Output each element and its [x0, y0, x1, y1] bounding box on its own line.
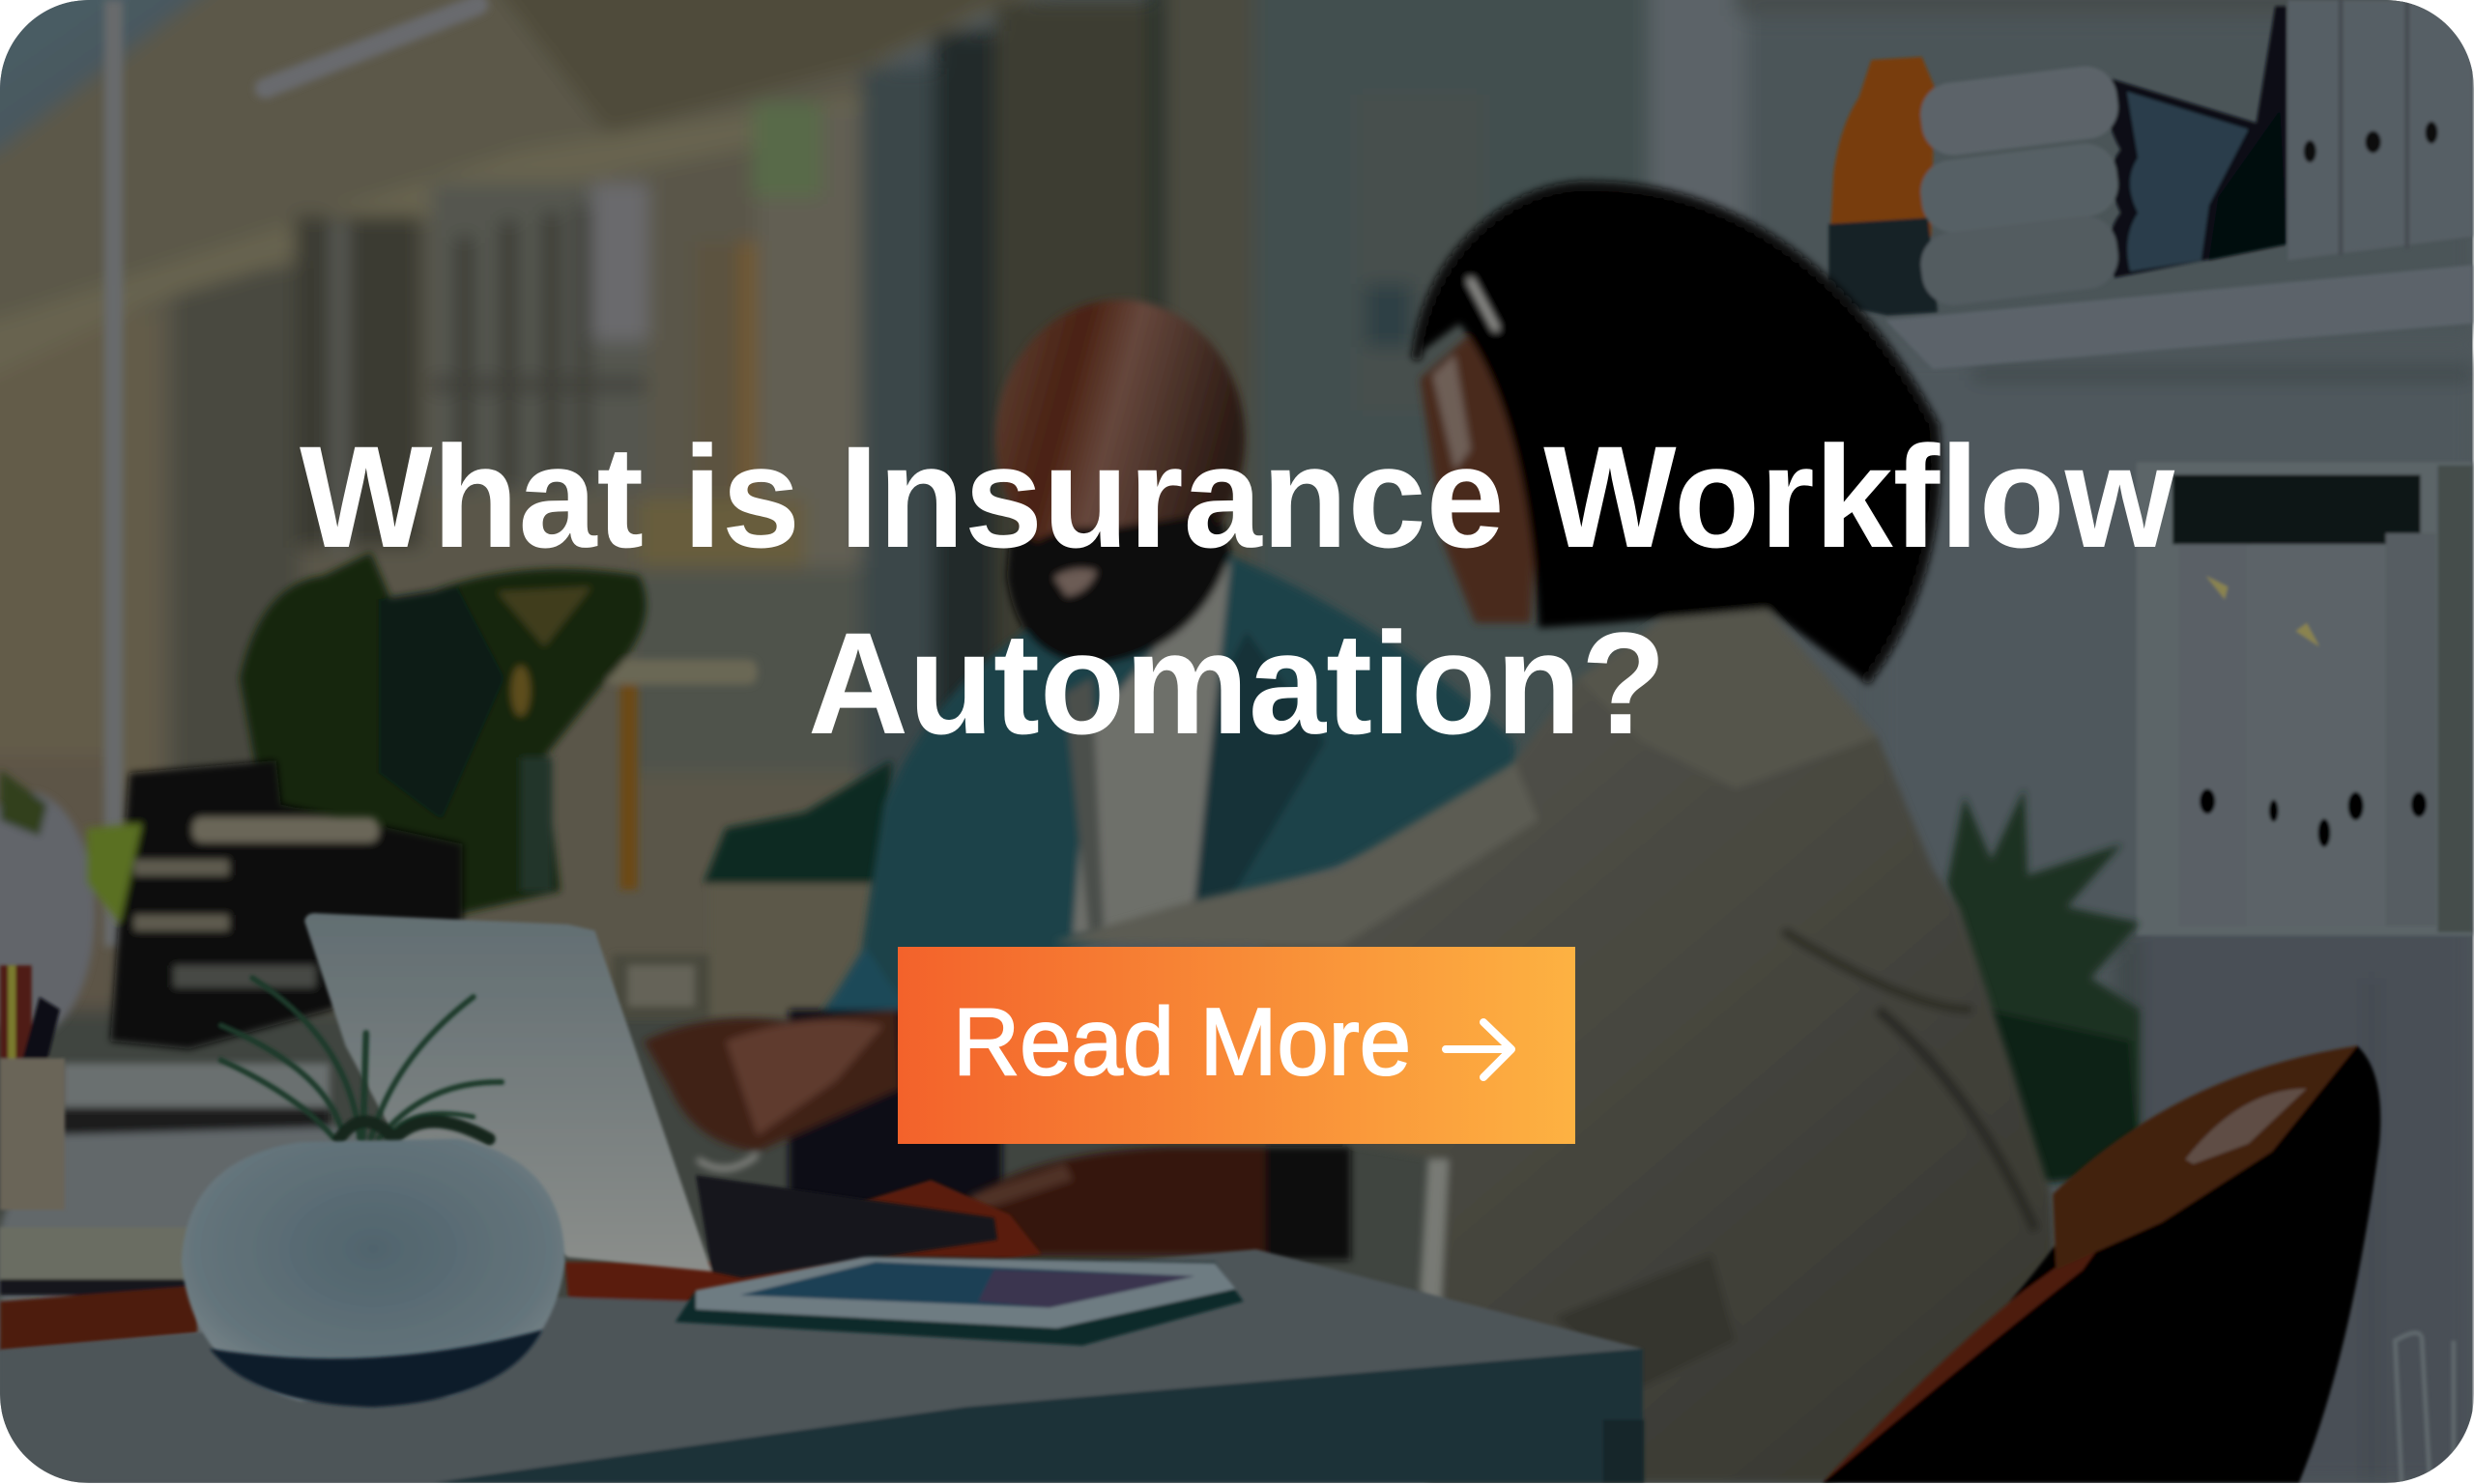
- front desk: [0, 1180, 1644, 1483]
- button label: Read More: [953, 988, 1411, 1095]
- tablet: [676, 1256, 1244, 1346]
- lower binder shelf: [2137, 462, 2472, 1483]
- shelf with bottle, towels and dark decor: [1828, 0, 2472, 369]
- potted plant on the desk: [182, 978, 565, 1407]
- title: What is Insurance Workflow: [300, 415, 2174, 578]
- icon: right arrow: [1446, 1022, 1511, 1077]
- brown chair: [1823, 1045, 2380, 1483]
- pen cup and books: [0, 965, 197, 1351]
- left shelf lamp and plant: [240, 552, 758, 930]
- laptop: [304, 913, 997, 1277]
- man with teal jacket: [644, 300, 1514, 1222]
- title: Automation?: [808, 602, 1666, 764]
- ceiling light: [265, 5, 478, 88]
- title: [300, 415, 2174, 764]
- rack, small plant, box and desk clutter: [0, 760, 891, 1341]
- glass divider post: [104, 0, 123, 947]
- woman with beige blazer: [965, 186, 2083, 1483]
- plant behind chair: [1947, 788, 2140, 1184]
- read more button: [898, 947, 1575, 1144]
